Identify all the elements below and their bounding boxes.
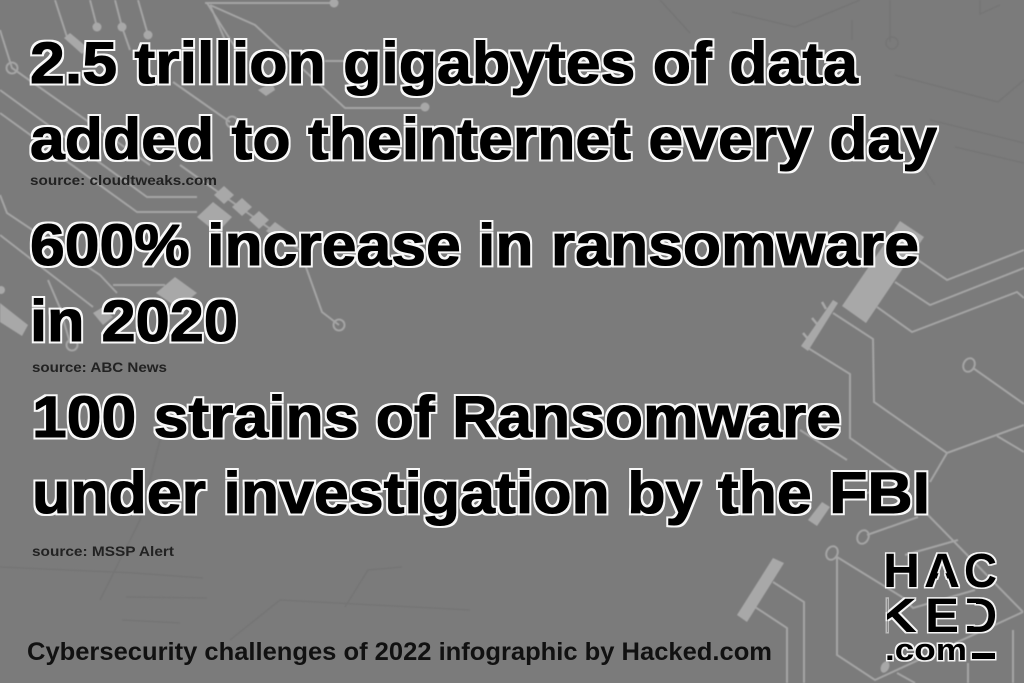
logo: Hacked.com	[884, 552, 998, 662]
light traces right	[755, 250, 1024, 683]
stat 3 heading: under investigation by the FBI	[32, 461, 930, 526]
light pads right	[737, 221, 924, 674]
logo: Hacked.com: A	[924, 545, 960, 598]
stat 2 heading: 600% increase in ransomware	[30, 213, 919, 278]
footer credit: Cybersecurity challenges of 2022 infographic by Hacked.com	[27, 638, 772, 666]
light traces top left	[0, 0, 425, 350]
stat 2 heading	[30, 213, 919, 354]
stat 1 heading: 2.5 trillion gigabytes of data	[30, 31, 858, 96]
stat 1 heading	[30, 31, 937, 172]
logo: Hacked.com: E	[925, 590, 959, 643]
logo: Hacked.com: D	[964, 590, 997, 643]
logo: Hacked.com: K	[875, 590, 917, 643]
source 3: source: MSSP Alert	[32, 543, 174, 559]
source 1: source: cloudtweaks.com	[30, 172, 217, 188]
light pads top left	[0, 0, 430, 336]
logo: Hacked.com: .com	[885, 632, 967, 667]
stat 2 heading: in 2020	[30, 289, 238, 354]
stat 3 heading: 100 strains of Ransomware	[32, 385, 841, 450]
source 2: source: ABC News	[32, 359, 167, 375]
logo: Hacked.com: H	[883, 545, 920, 598]
stat 3 heading	[32, 385, 930, 526]
logo: Hacked.com: C	[964, 545, 997, 598]
stat 1 heading: added to theinternet every day	[30, 107, 937, 172]
